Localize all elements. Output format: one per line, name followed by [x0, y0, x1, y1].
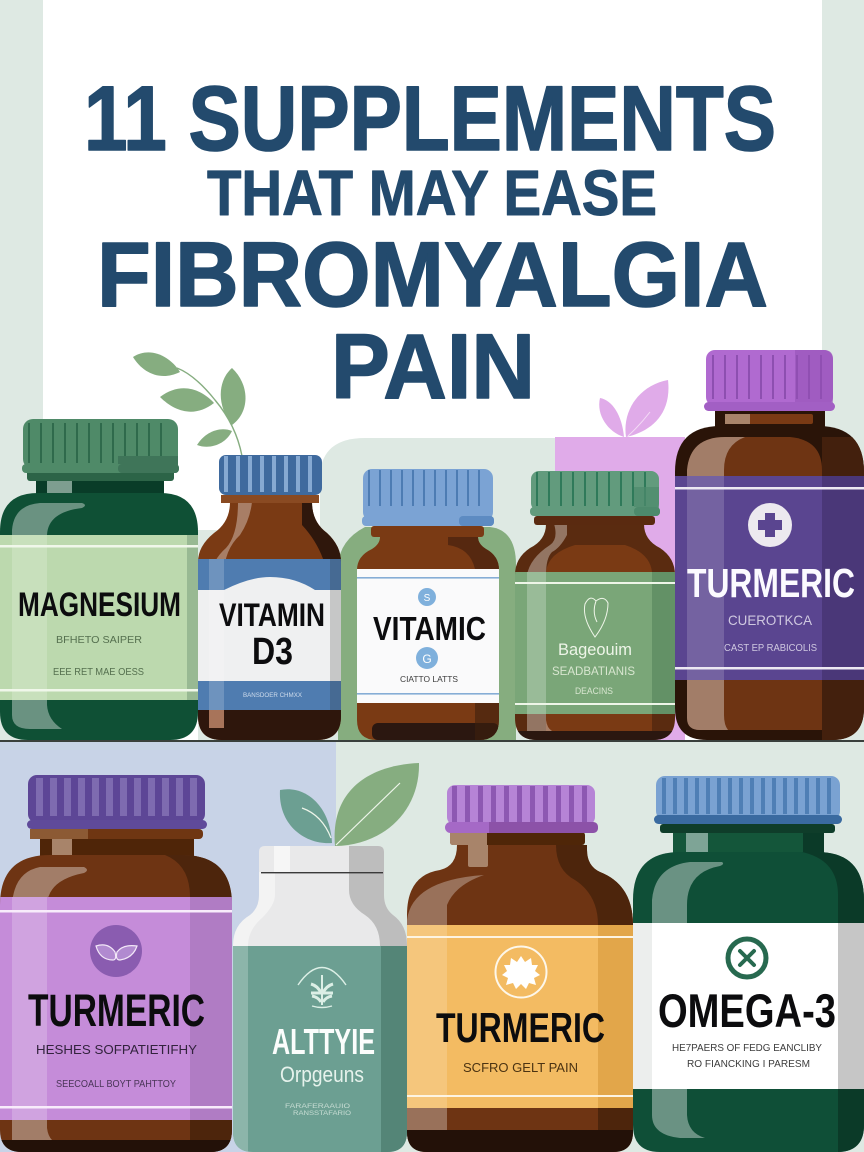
turmeric orange label text — [436, 1004, 605, 1075]
blue cap — [654, 776, 842, 824]
bottle: magnesium — [0, 419, 198, 740]
vitamic label text and icons — [373, 588, 486, 684]
blue cap — [219, 455, 322, 495]
icon: sunburst — [496, 946, 546, 998]
altyie label text: Orpgeuns — [280, 1062, 364, 1087]
icon: plant arc — [298, 968, 346, 1008]
vitamic label text and icons: CIATTO LATTS — [400, 674, 458, 684]
turmeric lilac label text: TURMERIC — [28, 985, 205, 1036]
title: FIBROMYALGIA — [97, 224, 768, 326]
green cap — [22, 419, 179, 473]
green cap — [530, 471, 660, 516]
vitamin D3 label text: D3 — [252, 631, 293, 673]
vitamin D3 label text: VITAMIN — [219, 597, 325, 633]
turmeric purple label text — [687, 560, 855, 654]
altyie label text: RANSSTAFARIO — [293, 1111, 351, 1117]
dark purple cap — [27, 775, 207, 829]
magnesium label text: MAGNESIUM — [18, 586, 181, 624]
vitamic label text and icons: G — [422, 652, 432, 666]
bottle: turmeric lilac label — [0, 775, 232, 1152]
title: THAT MAY EASE — [207, 157, 657, 229]
turmeric purple label text: CUEROTKCA — [728, 612, 813, 628]
omega-3 label text: RO FIANCKING I PARESM — [687, 1058, 810, 1070]
turmeric orange label text: TURMERIC — [436, 1004, 605, 1051]
icon: lotus leaves — [90, 925, 142, 977]
omega-3 label text: HE7PAERS OF FEDG EANCLIBY — [672, 1042, 822, 1054]
bottle: vitamin D3 — [198, 455, 341, 740]
magnesium label text — [18, 586, 181, 678]
bottle: vitamic — [357, 469, 499, 740]
altyie label text: FARAFERAAUIO — [285, 1104, 350, 1110]
title: PAIN — [331, 316, 535, 418]
bottle: bageouim — [515, 471, 675, 740]
magnesium label text: BFHETO SAIPER — [56, 635, 142, 646]
vitamic label text and icons: VITAMIC — [373, 610, 486, 647]
omega-3 label text — [658, 984, 836, 1070]
bageouim label text and icon — [552, 598, 635, 696]
bottle: turmeric orange label — [407, 785, 640, 1152]
purple cap — [704, 350, 835, 411]
turmeric orange label text: SCFRO GELT PAIN — [463, 1061, 578, 1075]
title — [84, 68, 776, 418]
altyie label text: ALTTYIE — [272, 1021, 375, 1062]
blue cap — [362, 469, 494, 526]
bageouim label text and icon: SEADBATIANIS — [552, 664, 635, 678]
bottle: turmeric purple label — [675, 350, 864, 740]
icon: lilac leaves — [599, 380, 668, 437]
turmeric lilac label text: SEECOALL BOYT PAHTTOY — [56, 1079, 176, 1090]
bottle: altyie white — [233, 846, 407, 1152]
vitamin D3 label text — [219, 597, 325, 699]
bageouim label text and icon: Bageouim — [558, 640, 632, 659]
icon: circled x — [728, 939, 766, 977]
lilac background panel — [555, 437, 685, 740]
bageouim label text and icon: DEACINS — [575, 686, 613, 696]
icon: medical cross — [748, 503, 792, 547]
icon: green sprig — [133, 352, 246, 456]
altyie label text — [272, 1021, 375, 1117]
light purple cap — [445, 785, 598, 833]
vitamic label text and icons: S — [424, 593, 431, 604]
magnesium label text: EEE RET MAE OESS — [53, 667, 144, 678]
icon: teal and green leaves — [280, 763, 419, 846]
bottle: omega-3 — [633, 776, 864, 1152]
turmeric lilac label text — [28, 985, 205, 1090]
turmeric purple label text: CAST EP RABICOLIS — [724, 642, 817, 654]
vitamin D3 label text: BANSDOER CHMXX — [243, 693, 302, 699]
green background panel — [338, 527, 516, 740]
turmeric lilac label text: HESHES SOFPATIETIFHY — [36, 1043, 198, 1057]
